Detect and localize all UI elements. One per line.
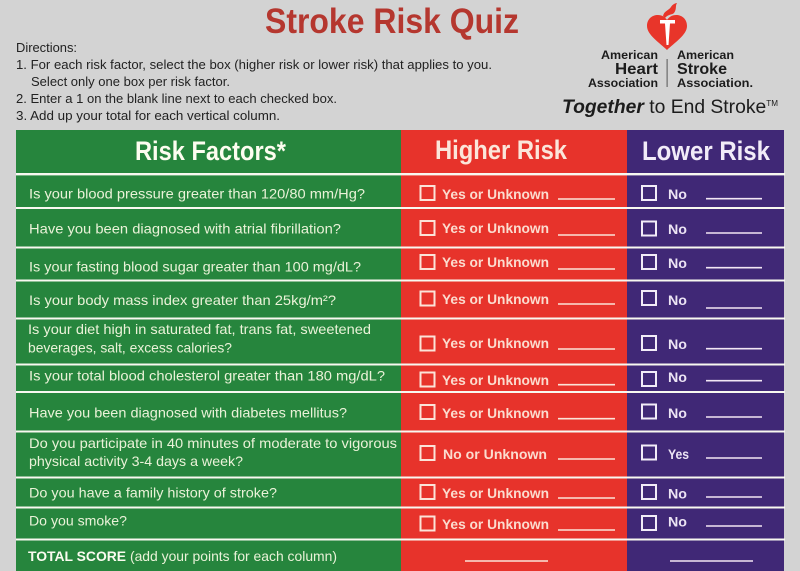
row: physical activity: Do you participate in 40 minutes of moderate to vigorous: [29, 435, 397, 451]
row: cholesterol: No: [668, 370, 687, 385]
row: fasting blood sugar: Is your fasting blood sugar greater than 100 mg/dL?: [29, 258, 361, 274]
row: atrial fibrillation: [29, 220, 762, 237]
row: blood pressure: No: [668, 187, 687, 202]
row: body mass index: No: [668, 293, 687, 308]
logo: American Heart / American Stroke Association: Together to End Stroke: [562, 97, 764, 118]
title: Stroke Risk Quiz: [265, 2, 519, 41]
logo: American Heart / American Stroke Association: TM: [766, 99, 778, 108]
row: diet: [28, 321, 762, 356]
row: smoking: Do you smoke?: [29, 512, 127, 528]
row: fasting blood sugar: [29, 255, 762, 274]
directions text block: 1. For each risk factor, select the box (higher risk or lower risk) that applies to you.: [16, 58, 492, 72]
row: blood pressure: Is your blood pressure greater than 120/80 mm/Hg?: [29, 186, 365, 202]
row: blood pressure: Yes or Unknown: [442, 187, 549, 202]
logo: American Heart / American Stroke Association: [562, 3, 778, 118]
directions text block: [16, 41, 492, 123]
row: smoking: [29, 512, 762, 532]
directions text block: Select only one box per risk factor.: [31, 75, 230, 89]
row: blood pressure: [29, 186, 762, 202]
column heading: Higher Risk: Higher Risk: [435, 135, 568, 165]
row: diabetes: [29, 404, 762, 421]
row: fasting blood sugar: Yes or Unknown: [442, 255, 549, 270]
directions text block: Directions:: [16, 41, 77, 55]
row: body mass index: [29, 291, 762, 308]
logo: American Heart / American Stroke Association: Association.: [677, 76, 753, 90]
row: family history: No: [668, 487, 687, 502]
row: smoking: Yes or Unknown: [442, 517, 549, 532]
row: family history: Do you have a family history of stroke?: [29, 484, 277, 500]
row: total score: TOTAL SCORE (add your points for each column): [28, 548, 337, 564]
row: physical activity: [29, 435, 762, 469]
row: physical activity: Yes: [668, 447, 689, 462]
row: cholesterol: Yes or Unknown: [442, 373, 549, 388]
table background columns: [16, 130, 784, 571]
row: atrial fibrillation: No: [668, 222, 687, 237]
row: diabetes: Yes or Unknown: [442, 406, 549, 421]
row: diet: Yes or Unknown: [442, 336, 549, 351]
row: cholesterol: [29, 368, 762, 388]
row: physical activity: physical activity 3-4 days a week?: [29, 453, 243, 469]
row: fasting blood sugar: No: [668, 256, 687, 271]
row: body mass index: Is your body mass index greater than 25kg/m²?: [29, 292, 336, 308]
logo: American Heart / American Stroke Association: Association: [588, 76, 658, 90]
logo: American Heart / American Stroke Association: American: [677, 48, 734, 62]
row: smoking: No: [668, 515, 687, 530]
row: diet: Is your diet high in saturated fat, trans fat, sweetened: [28, 321, 371, 337]
row: diet: No: [668, 337, 687, 352]
logo: American Heart / American Stroke Association: American: [601, 48, 658, 62]
row: atrial fibrillation: Yes or Unknown: [442, 221, 549, 236]
row: diabetes: Have you been diagnosed with diabetes mellitus?: [29, 404, 347, 420]
row: cholesterol: Is your total blood cholesterol greater than 180 mg/dL?: [29, 368, 385, 384]
column heading: Risk Factors: Risk Factors*: [135, 136, 286, 166]
row: family history: Yes or Unknown: [442, 486, 549, 501]
row: diet: beverages, salt, excess calories?: [28, 340, 232, 356]
logo: American Heart / American Stroke Association: Heart: [615, 61, 659, 78]
directions text block: 2. Enter a 1 on the blank line next to each checked box.: [16, 92, 337, 106]
icon: heart and torch: [647, 3, 687, 50]
row: body mass index: Yes or Unknown: [442, 292, 549, 307]
row: physical activity: No or Unknown: [443, 447, 547, 462]
row: diabetes: No: [668, 406, 687, 421]
row: atrial fibrillation: Have you been diagnosed with atrial fibrillation?: [29, 220, 341, 236]
logo: American Heart / American Stroke Association: Stroke: [677, 61, 727, 78]
directions text block: 3. Add up your total for each vertical column.: [16, 109, 280, 123]
column heading: Lower Risk: Lower Risk: [642, 136, 771, 166]
row: family history: [29, 484, 762, 502]
